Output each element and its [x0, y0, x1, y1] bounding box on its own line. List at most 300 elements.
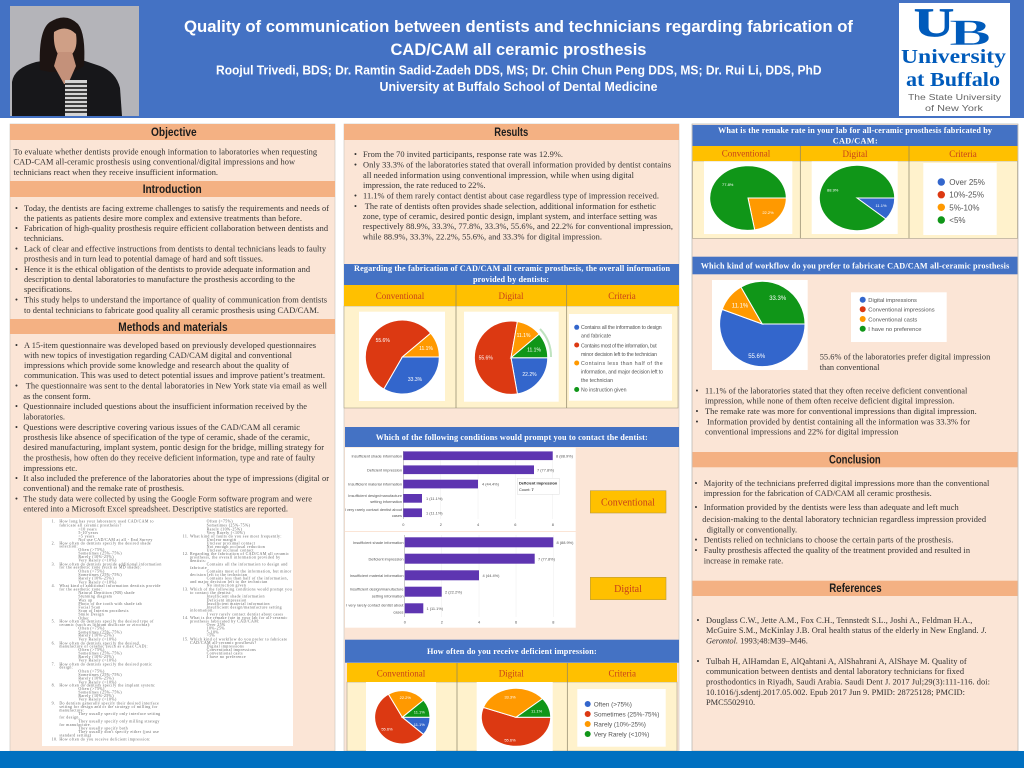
question heading: Which kind of workflow do you prefer to fabricate CAD/CAM all-ceramic prosthesis [701, 262, 1009, 270]
text block: introduction: Fabrication of high-quality prosthesis require efficient collaboration between dentists and [24, 224, 329, 233]
authors and school [216, 62, 822, 94]
pie: digital: 11.1% [517, 333, 531, 339]
pie: conventional [704, 161, 792, 234]
questionnaire image: 9. [52, 700, 55, 705]
questionnaire image: Sometimes (25%-75%) [78, 672, 122, 677]
pie: workflow: 11.1% [732, 304, 749, 310]
questionnaire image: CAD/CAM all-ceramic prosthesis? [190, 640, 257, 645]
questionnaire image: Rarely (10%-25%) [78, 654, 114, 659]
questionnaire image: Rarely (10%-25%) [207, 526, 243, 531]
questionnaire image: Scan of Interim prosthesis [78, 608, 129, 613]
questionnaire image: Often (>75%) [78, 569, 105, 574]
questionnaire image: Contains all the information to design and [207, 562, 288, 567]
text block: results: 11.1% of them rarely contact dentist about case regardless type of impression received. [363, 192, 659, 200]
questionnaire image: Over 25% [207, 622, 226, 627]
text block: methods: • [15, 474, 18, 483]
question heading [692, 125, 1018, 146]
questionnaire image: Which kind of workflow do you prefer to fabricate [190, 636, 287, 641]
text block: findings: conventional impressions and 22% for digital impression [705, 428, 899, 436]
text block: introduction: prosthesis and in turn lead to potential damage of hard and soft tissues. [24, 254, 263, 264]
legend: criteria: the technician [581, 378, 613, 384]
footer bar [0, 751, 1024, 768]
text block: objective: CAD-CAM all-ceramic prosthesis using conventional/digital impressions and how [14, 158, 296, 167]
bar chart: conventional [345, 448, 576, 531]
question heading: Which of the following conditions would prompt you to contact the dentist: [376, 433, 648, 442]
text block: methods: desired manufacturing, implant system, pontic design for the bridge, milling strategy for [23, 443, 324, 452]
text block: methods: Questions were descriptive covering various issues of the CAD/CAM all ceramic [23, 423, 300, 432]
questionnaire image: Rarely (10%-25%) [78, 676, 114, 681]
questionnaire image: 13. [183, 586, 189, 591]
bar chart: digital: I very rarely contact dentist about [346, 602, 404, 608]
text block: references: communication between dentists and dental laboratory technicians for fixed [706, 667, 965, 676]
title [184, 17, 853, 59]
logo: University at Buffalo: The State University [908, 93, 1001, 102]
questionnaire image: to contact the dentist: [190, 590, 232, 595]
questionnaire image: for manufacture. [59, 722, 91, 727]
questionnaire image: 12. [183, 551, 189, 556]
text block: references: McGuire S.M., McKinlay J.B. Oral health status of the elderly in New England. J. [706, 626, 987, 635]
questionnaire image: 3. [52, 561, 55, 566]
text block: findings: • [696, 418, 698, 426]
questionnaire image: for design. [59, 715, 80, 720]
questionnaire image: Facial Scan [78, 605, 100, 610]
questionnaire image: 5-10% [207, 629, 219, 634]
text block: conclusion: increase in remake rate. [704, 556, 783, 566]
bar chart: digital: cases [393, 610, 404, 614]
bar chart: digital: Insufficient design/manufacture [350, 586, 404, 592]
text block: introduction: • [15, 265, 18, 274]
legend: criteria [923, 163, 997, 235]
bar chart: digital: 8 [552, 620, 554, 624]
questionnaire image: Rarely (10%-25%) [78, 693, 114, 698]
questionnaire image: 4. [52, 583, 55, 588]
text block: methods: with new topics of investigation regarding CAD/CAM digital and conventional [24, 351, 293, 360]
text block: methods: The questionnaire was sent to the dental laboratories in New York state via email as well [26, 382, 328, 390]
questionnaire image: >5 years [78, 534, 95, 539]
text block: methods: the prosthesis, how often do they receive deficient information, type and rate of faulty [23, 454, 316, 462]
questionnaire image: 10. [52, 736, 58, 741]
text block: results: impression, the rate reduced to 22%. [363, 181, 486, 190]
pie: conventional: 22.2% [762, 210, 774, 215]
tooltip: Count: 7 [519, 487, 534, 492]
tooltip: Deficient impression [519, 480, 558, 486]
text block: references: PMC5502910. [706, 698, 755, 707]
questionnaire image: Not use CAD/CAM at all - End Survey [78, 537, 153, 542]
text block: references: Gerontol. 1993;48:M39–M46. [706, 636, 808, 646]
bar chart: conventional: 1 (11.1%) [426, 510, 443, 515]
label: conventional: Conventional [601, 498, 655, 508]
questionnaire image: Rarely (10%-25%) [78, 633, 114, 638]
questionnaire image: 5. [52, 619, 55, 624]
questionnaire image: Smile Design [78, 612, 104, 617]
text block: conclusion: impression for the fabrication of CAD/CAM all ceramic prosthesis. [704, 489, 932, 498]
questionnaire image: How often do dentists provide additional information [59, 561, 162, 566]
text block: conclusion: • [694, 546, 698, 555]
pie: conventional [359, 312, 445, 401]
text block: results: • [354, 202, 357, 211]
questionnaire image: Insufficient design/manufacture setting [207, 604, 282, 609]
pie: workflow [712, 280, 808, 370]
question heading [345, 640, 679, 663]
bar chart: conventional: 0 [402, 522, 405, 527]
heading: results [344, 124, 679, 140]
text block: references: • [696, 616, 700, 625]
legend: criteria: Often (>75%) [594, 701, 632, 708]
questionnaire image: ceramic (such as lithium disilicate or zirconia): [59, 622, 151, 627]
questionnaire image: They usually don't specify either (just use [78, 729, 159, 734]
questionnaire image: fabricate [190, 565, 207, 570]
questionnaire image: They usually specify only milling strategy [78, 718, 160, 723]
bar chart: conventional: Deficient impression [367, 467, 402, 472]
questionnaire image: How often do dentists specify the desired pontic [59, 661, 152, 666]
questionnaire image: dentists: [190, 558, 206, 563]
questionnaire image: Often (>75%) [78, 686, 105, 691]
heading: methods and materials: Methods and materials [118, 322, 228, 334]
logo: University at Buffalo: B [949, 13, 991, 54]
bar chart: digital: 6 [515, 620, 517, 624]
questionnaire image: Unclear proximal contact [207, 540, 256, 545]
text block: introduction: to dental technicians to fabricate good quality all ceramic prosthesis using CAD/CAM. [24, 306, 319, 315]
questionnaire image: What kind of additional information dentists provide [59, 583, 161, 588]
table [692, 146, 1018, 238]
table: Digital [842, 149, 868, 159]
heading: results: Results [494, 127, 528, 139]
table [347, 663, 677, 751]
text block: references: Douglass C.W., Jette A.M., Fox C.H., Tennstedt S.L., Joshi A., Feldman H.A., [706, 616, 972, 625]
text block: methods: laboratories. [23, 412, 65, 422]
legend: criteria: and fabricate [581, 334, 611, 340]
heading: introduction: Introduction [143, 184, 202, 196]
pie: conventional: 55.6% [381, 726, 393, 732]
questionnaire image: Very Rarely (<10%) [78, 658, 117, 663]
heading: objective [10, 124, 335, 140]
text block: results: zone, type of ceramic, desired pontic design, implant system, and interface setting was [363, 212, 657, 221]
author photo [10, 6, 139, 116]
bar chart: digital: 2 [441, 620, 443, 624]
text block: references: prosthodontics in Riyadh, Saudi Arabia. Saudi Dent J. 2017 Jul;29(3):111-116. doi: [706, 678, 990, 686]
questionnaire image: design: [59, 665, 73, 670]
text block: objective [14, 148, 318, 177]
questionnaire image: Which of the following conditions would prompt you [190, 586, 292, 591]
questionnaire image: No instruction given [207, 583, 246, 588]
text block: introduction: Hence it is the ethical obligation of the dentists to provide adequate information and [24, 265, 311, 274]
text block: conclusion: • [694, 503, 698, 512]
pie: conventional: 11.1% [414, 722, 425, 727]
questionnaire image: Photo of the tooth with shade tab [78, 601, 142, 606]
questionnaire image: Unclear margin [207, 537, 236, 542]
text block: objective: technicians react when they receive insufficient information. [14, 168, 218, 177]
questionnaire image: 10%-25% [207, 626, 225, 631]
questionnaire image: Sometimes (25%-75%) [78, 629, 122, 634]
text block: conclusion: Faulty prosthesis affected the quality of the treatment provided and resulted in [704, 546, 971, 555]
questionnaire image: selection: [59, 544, 78, 549]
text block: results: • [354, 150, 357, 159]
heading: conclusion [692, 452, 1018, 467]
question heading: provided by dentists: [473, 275, 549, 284]
legend: criteria: 10%-25% [949, 191, 984, 200]
questionnaire image: I have no preference [207, 654, 246, 659]
bar chart: digital: 0 [404, 620, 407, 624]
questionnaire image: Very Rarely (<10%) [207, 530, 245, 535]
legend: criteria: information, and major decision left to [581, 370, 663, 376]
label: conventional [590, 491, 666, 513]
text block: methods: communication. This was used to detect potential issues and improve patient’s treatment. [24, 371, 325, 380]
legend: criteria: Very Rarely (<10%) [594, 731, 649, 738]
questionnaire image: Very Rarely (<10%) [78, 679, 117, 684]
questionnaire image: prosthesis fabricated by CAD/CAM: [190, 619, 260, 624]
legend: workflow: Conventional impressions [868, 308, 935, 314]
legend: workflow [851, 292, 947, 342]
pie: digital: 11.1% [527, 348, 541, 354]
questionnaire image [42, 518, 293, 746]
questionnaire image: prosthesis, the overall information provided by [190, 555, 280, 561]
text block: methods: entered into a Microsoft Excel spreadsheet. Descriptive statistics are reported. [23, 504, 288, 514]
questionnaire image: Rarely (10%-25%) [78, 554, 114, 559]
legend: criteria [569, 314, 672, 401]
text block: methods [15, 341, 329, 514]
bar chart: conventional: 4 (44.4%) [482, 482, 500, 487]
pie: conventional: 33.3% [408, 377, 423, 383]
text block: conclusion: Majority of the technicians preferred digital impressions more than the conventional [704, 479, 990, 488]
bar chart: conventional: 2 [440, 522, 442, 527]
bar chart: conventional: cases [392, 513, 402, 518]
text block: methods: as the consent form. [23, 392, 91, 401]
questionnaire image: 6. [52, 640, 55, 645]
text block: findings: • [696, 386, 698, 396]
text block: introduction: technicians. [24, 234, 64, 243]
questionnaire image: How long has your laboratory used CAD/CAM to [59, 519, 154, 524]
text block: results: Only 33.3% of the laboratories stated that overall information provided by dentist contains [363, 160, 671, 170]
question heading: CAD/CAM: [833, 136, 878, 146]
heading: conclusion: Conclusion [829, 454, 881, 466]
text block: conclusion: digitally or conventionally. [707, 526, 797, 534]
title: Quality of communication between dentists and technicians regarding fabrication of [184, 17, 853, 36]
text block: references: Tulbah H, AlHamdan E, AlQahtani A, AlShahrani A, AlShaye M. Quality of [706, 657, 967, 666]
pie: conventional: 11.1% [414, 710, 425, 714]
questionnaire image: standard setting) [59, 733, 92, 738]
text block: conclusion: • [694, 536, 698, 544]
pie: digital: 33.3% [504, 694, 516, 700]
text block: introduction: the patients as patients desire more complex and extensive treatments than before. [24, 214, 302, 223]
section: preferred workflow [692, 257, 1018, 436]
bar chart: conventional: 8 [552, 522, 554, 527]
text block: conclusion: decision-making to the dental laboratory technician regardless impression provided [702, 515, 987, 524]
questionnaire image: Sometimes (25%-75%) [78, 572, 122, 577]
question heading [345, 427, 679, 447]
questionnaire image: I very rarely contact dentist about cases [207, 611, 284, 616]
question heading: How often do you receive deficient impression: [427, 647, 597, 656]
text block: results: From the 70 invited participants, response rate was 12.9%. [363, 150, 563, 159]
questionnaire image: Other [78, 615, 89, 620]
text block: conclusion: • [694, 479, 698, 488]
bar chart: conventional: 1 (11.1%) [426, 496, 443, 501]
bar chart: conventional: Insufficient design/manufacture [348, 493, 402, 498]
questionnaire image: Conventional impressions [207, 647, 256, 652]
text block: methods: The study data were collected by using the Google Form software program and were [23, 494, 312, 504]
questionnaire image: Not enough occlusal reduction [207, 544, 265, 549]
pie: digital: 11.1% [875, 203, 887, 208]
heading: objective: Objective [151, 127, 197, 139]
questionnaire image: How often do dentists specify the desired shade [59, 540, 151, 545]
questionnaire image: Rarely (10%-25%) [78, 575, 114, 580]
panel: left column [10, 124, 335, 751]
questionnaire image: Insufficient material information [207, 601, 270, 606]
title: CAD/CAM all ceramic prosthesis [390, 40, 646, 59]
text block: methods: conventional) and the remake rate of prosthesis. [23, 484, 184, 493]
text block: findings: 11.1% of the laboratories stated that they often receive deficient conventional [705, 386, 968, 396]
heading: references: References [829, 583, 882, 595]
questionnaire image: manufacture of ceramic (such as e.max CAD): [59, 644, 148, 649]
pie: digital: 88.9% [827, 188, 839, 192]
text block: findings: The remake rate was more for conventional impressions than digital impression. [705, 407, 977, 416]
pie: digital: 22.2% [522, 372, 537, 378]
questionnaire image: Often (>75%) [78, 547, 105, 552]
questionnaire image: Regarding the fabrication of CAD/CAM all ceramic [190, 551, 289, 556]
questionnaire image: Sometimes (25%-75%) [78, 551, 122, 556]
bar chart: digital: 2 (22.2%) [445, 589, 463, 594]
text: digital preference: than conventional [820, 363, 880, 372]
questionnaire image: Often (>75%) [78, 668, 105, 673]
questionnaire image: Often (>75%) [78, 626, 105, 631]
table: Criteria [609, 668, 636, 678]
questionnaire image: What is the remake rate in your lab for all-ceramic [190, 615, 288, 620]
heading: references [692, 581, 1018, 596]
text block: methods: A 15-item questionnaire was developed based on previously developed questionnaires [24, 341, 316, 350]
question heading [692, 257, 1018, 274]
questionnaire image: <5% [207, 633, 216, 638]
bar chart: conventional: 4 [477, 522, 480, 527]
questionnaire image: Often (>75%) [207, 519, 233, 524]
text: digital preference [820, 352, 991, 372]
questionnaire image: 1. [52, 519, 55, 524]
text block: introduction [15, 204, 329, 315]
pie: conventional: 55.6% [376, 338, 390, 344]
legend: criteria: minor decision left to the technician [581, 352, 657, 358]
questionnaire image: Wax up [78, 597, 93, 602]
panel: right column [692, 124, 1018, 751]
questionnaire image: Insufficient shade information [207, 594, 265, 599]
text block: introduction: This study helps to understand the importance of quality of communication from dentists [24, 296, 327, 304]
questionnaire image: 14. [183, 615, 189, 620]
pie: conventional: 77.8% [722, 182, 734, 187]
questionnaire image: How often do you receive deficient impression: [59, 736, 151, 741]
panel: middle column [344, 124, 679, 751]
questionnaire image: 5-10 years [78, 530, 98, 535]
bar chart: conventional: Insufficient shade information [351, 453, 402, 458]
questionnaire image: Digital impressions [207, 644, 244, 649]
bar chart: digital: 8 (88.9%) [556, 540, 574, 545]
questionnaire image: decision left to the technician [190, 572, 247, 577]
text block: introduction: Today, the dentists are facing extreme challenges to satisfy the requirements and needs of [24, 204, 329, 213]
section: remake rate [692, 125, 1018, 238]
table: Conventional [376, 291, 425, 301]
table: Digital [499, 668, 524, 678]
question heading: Regarding the fabrication of CAD/CAM all ceramic prosthesis, the overall information [354, 264, 670, 273]
questionnaire image: They usually specify both [78, 725, 128, 730]
text block: results: respectively 88.9%, 33.3%, 77.8%, 33.3%, 55.6%, and 22.2% for conventional impression, [363, 222, 673, 231]
bar chart: conventional: Insufficient material information [348, 482, 402, 487]
text block: methods: impressions which provide some knowledge and research about the quality of [24, 361, 289, 370]
questionnaire image: fabricate all ceramic prosthesis? [59, 522, 122, 527]
questionnaire image: Very Rarely (<10%) [78, 558, 117, 563]
authors and school: University at Buffalo School of Dental Medicine [380, 79, 658, 94]
bar chart: digital: 4 (44.4%) [482, 573, 500, 578]
questionnaire image: Very Rarely (<10%) [78, 579, 117, 584]
bar chart: conventional: 7 (77.8%) [537, 467, 555, 472]
text block: methods: impressions etc. [23, 464, 77, 473]
text: digital preference: 55.6% of the laboratories prefer digital impression [820, 352, 991, 362]
text block: results: while 88.9%, 33.3%, 22.2%, 55.6%, and 33.3% for digital impression. [363, 232, 602, 242]
pie: workflow: 55.6% [748, 354, 766, 360]
text block: findings: • [696, 407, 698, 416]
legend: criteria: Sometimes (25%-75%) [594, 711, 659, 718]
header banner [0, 0, 1024, 118]
questionnaire image: manufacture: [59, 708, 84, 713]
text block: findings: impression, while none of them often receive deficient digital impression. [705, 396, 954, 406]
table: Conventional [722, 148, 771, 158]
legend: criteria: No instruction given [581, 388, 627, 394]
text block: findings: Information provided by dentist containing all the information was 33.3% for [707, 418, 970, 426]
legend: criteria: Contains less than half of the [581, 361, 663, 367]
questionnaire image: Stunning diagram [78, 594, 113, 599]
heading: methods and materials [10, 319, 335, 334]
pie: digital: 55.6% [504, 738, 516, 742]
bar chart: digital: 1 (11.1%) [426, 606, 444, 611]
text block: methods: Questionnaire included questions about the insufficient information received by the [23, 402, 307, 411]
bar chart: digital: Insufficient material information [350, 573, 404, 578]
text block: methods: It also included the preference of the laboratories about the type of impressions (digital or [23, 474, 329, 483]
legend: criteria: Rarely (10%-25%) [594, 721, 646, 728]
pie: conventional: 11.1% [419, 346, 433, 352]
logo: University at Buffalo: of New York [925, 104, 984, 113]
questionnaire image: Natural Dentition (NB) shade [78, 590, 135, 595]
text block: introduction: • [15, 244, 18, 254]
questionnaire image: for the aesthetic zone: [59, 586, 102, 591]
text block: results [354, 150, 673, 242]
questionnaire image: 2. [52, 540, 55, 545]
questionnaire image: Contains less than half of the information, [207, 576, 288, 582]
label: digital: Digital [614, 584, 642, 595]
legend: criteria: Contains most of the information, but [581, 343, 657, 349]
questionnaire image: How often do dentists specify the desired type of [59, 619, 154, 624]
questionnaire image: information. [190, 608, 214, 613]
text block: introduction: • [15, 204, 18, 213]
text block: results: • [354, 160, 357, 170]
text block: methods: • [15, 494, 18, 504]
text block: results: • [354, 192, 357, 200]
text block: conclusion [694, 479, 990, 566]
bar chart: conventional: 6 [514, 522, 516, 527]
text block: methods: • [15, 341, 18, 350]
logo: University at Buffalo: U [914, 0, 954, 45]
questionnaire image: Unclear occlusal contact [207, 547, 254, 552]
legend: criteria: 5%-10% [949, 203, 980, 212]
text block: methods: • [15, 402, 18, 411]
pie: digital [464, 312, 559, 402]
bar chart: digital: 4 [478, 620, 481, 624]
bar chart: conventional: 8 (88.9%) [556, 453, 574, 458]
text block: results: all needed information using conventional impression, while when using digital [363, 171, 635, 180]
questionnaire image: Conventional casts [207, 650, 243, 655]
pie: conventional: 22.2% [400, 695, 411, 700]
text block: methods: prosthesis like absence of specification of the type of ceramic, shade of the ceramic, [23, 433, 310, 442]
bar chart: digital: setting information [372, 594, 404, 598]
table: Criteria [608, 291, 636, 301]
legend: workflow: Conventional casts [868, 317, 917, 323]
questionnaire image: How often do dentists specify the implant system: [59, 683, 155, 688]
questionnaire image: Contains most of the information, but minor [207, 569, 292, 575]
table: Digital [498, 291, 524, 301]
